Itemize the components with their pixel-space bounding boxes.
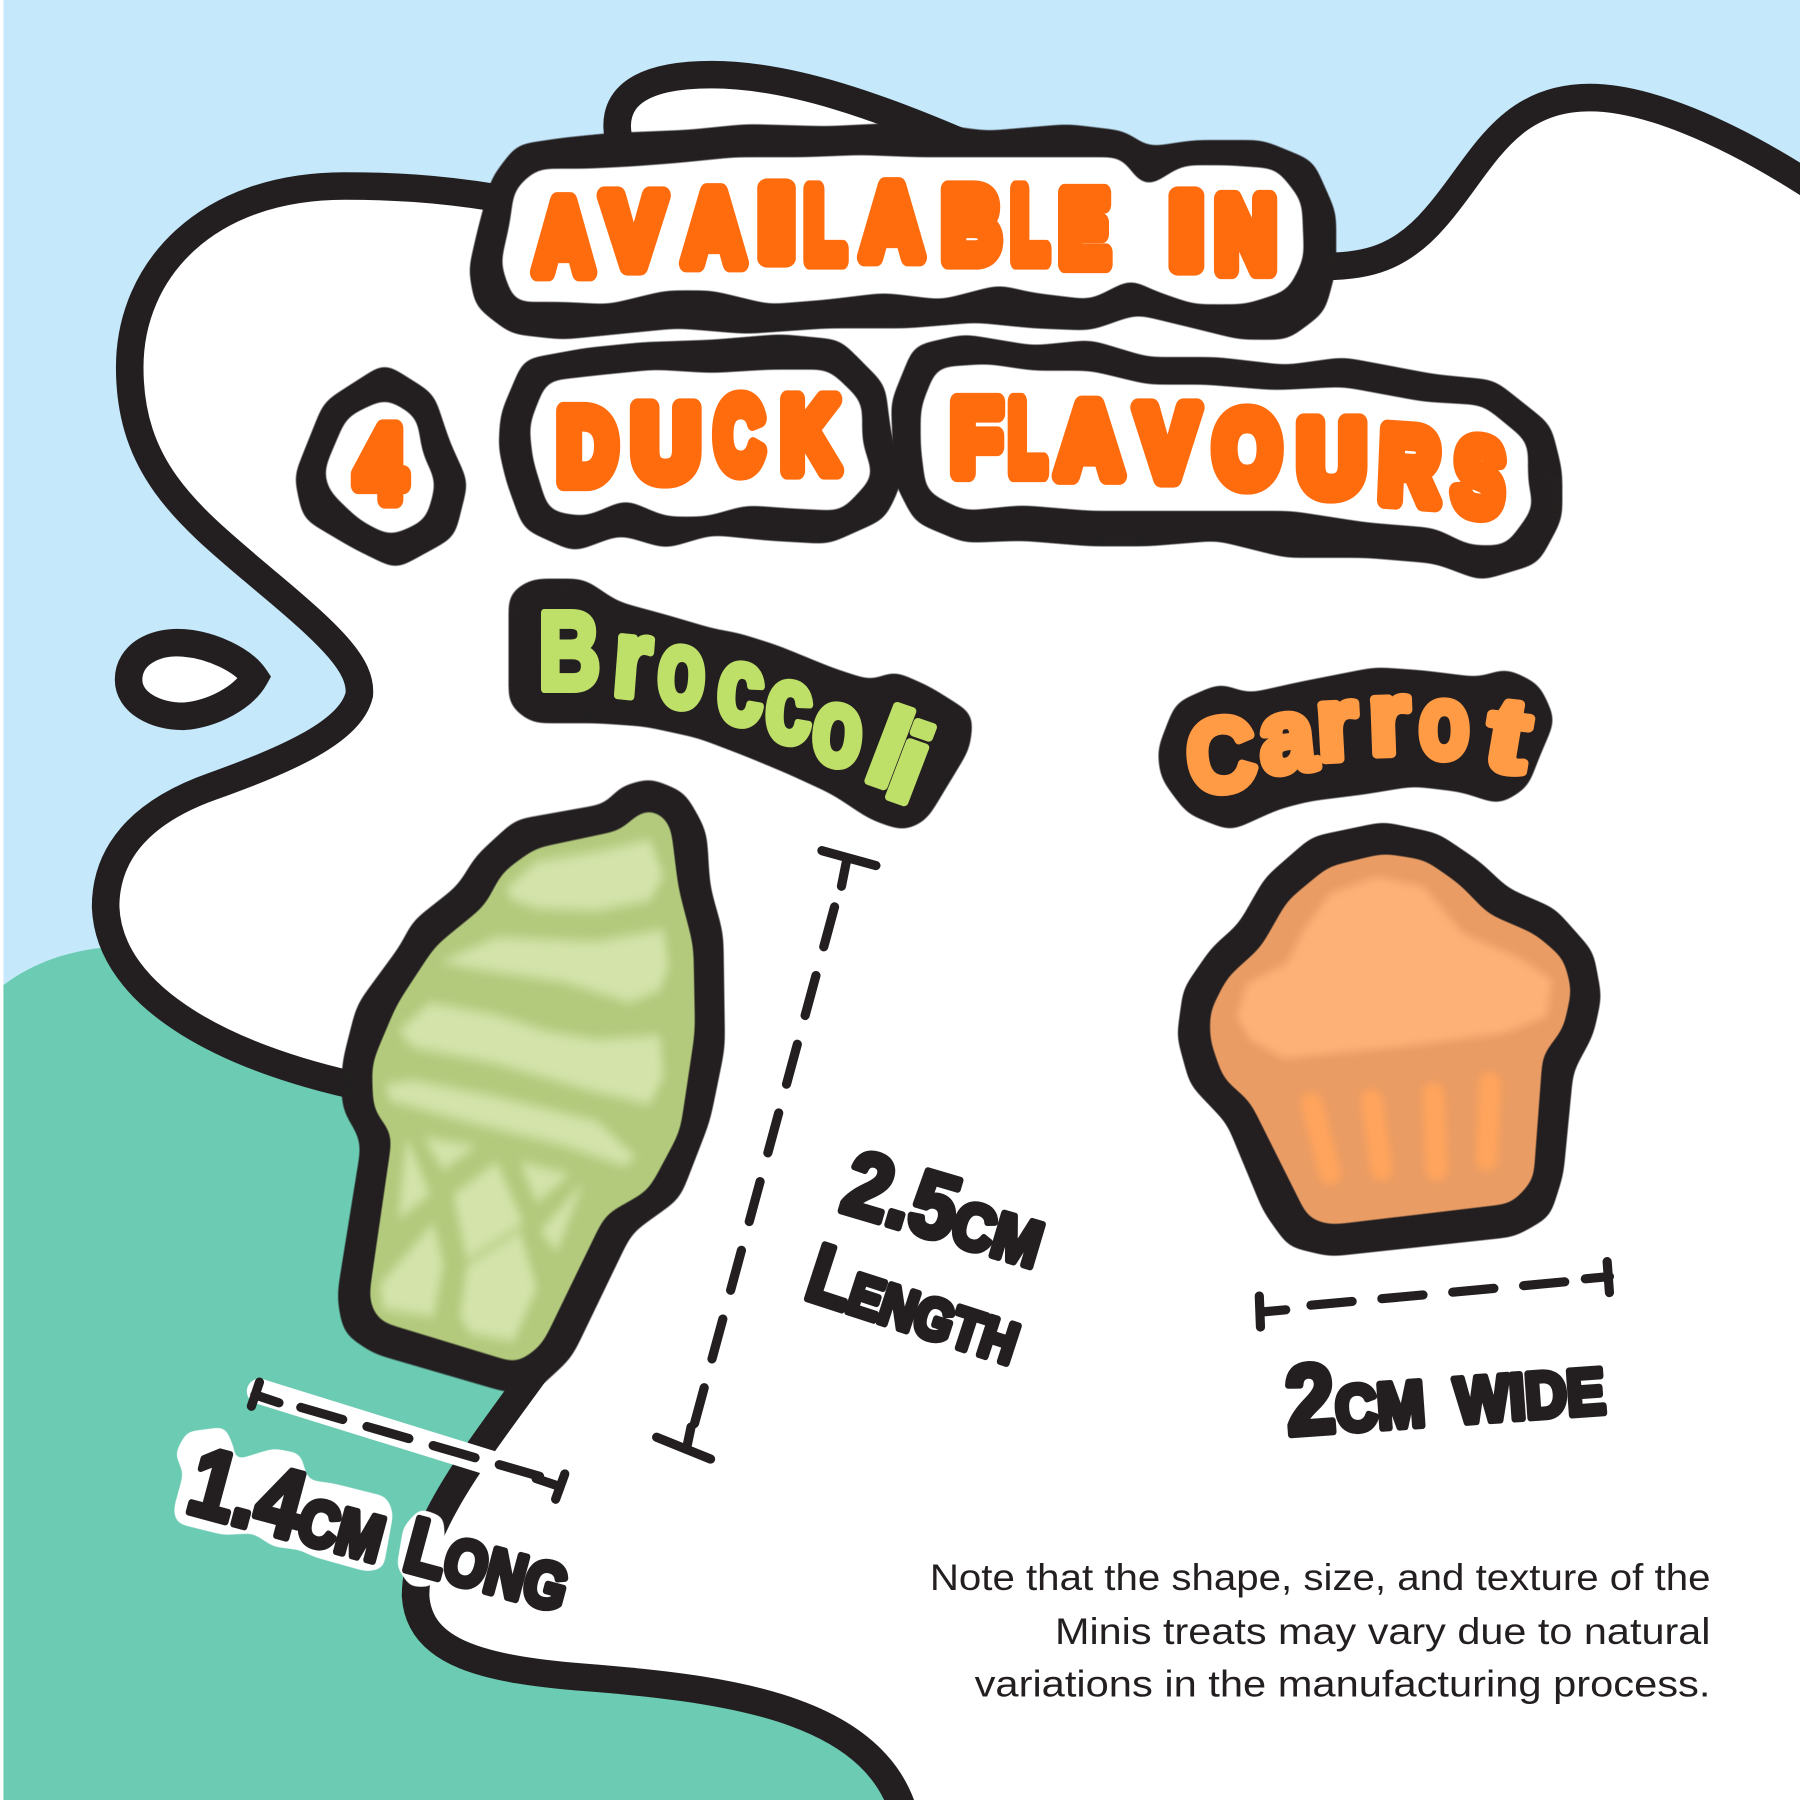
label: Carrot: a xyxy=(1253,674,1321,796)
label: Broccoli: B xyxy=(538,590,600,713)
title line 2: Flavours: L xyxy=(1009,379,1046,495)
label: Broccoli: r xyxy=(609,596,657,722)
label: Broccoli: o xyxy=(806,662,873,791)
title line 2: Duck: U xyxy=(633,385,699,501)
label: Broccoli: c xyxy=(761,641,819,767)
title line 1: Available in: I xyxy=(1171,172,1202,288)
title line 2: Flavours: R xyxy=(1378,405,1442,524)
title line 1: Available in: L xyxy=(805,167,845,283)
label: Broccoli xyxy=(509,579,973,831)
title line 2: Duck: C xyxy=(715,377,763,493)
note text xyxy=(930,1557,1710,1705)
top-left outline xyxy=(106,186,494,1091)
title line 1: Available in: A xyxy=(684,169,744,285)
title line 1: Available in: B xyxy=(942,167,1000,283)
text: 2.5cm length: 2.5CM xyxy=(832,1131,1057,1287)
title line 1: Available in: A xyxy=(862,163,922,279)
note text: Note that the shape, size, and texture of the xyxy=(930,1557,1710,1598)
title line 2: Flavours xyxy=(891,334,1562,581)
label: Broccoli: l xyxy=(853,685,925,812)
background: green hill xyxy=(3,947,930,1800)
measure: 1.4cm long line xyxy=(251,1382,565,1499)
title line 1: Available in: V xyxy=(604,172,664,288)
title line 1: Available in: E xyxy=(1060,170,1109,286)
label: Broccoli: c xyxy=(713,622,771,749)
broccoli treat: ice cream cone xyxy=(337,778,725,1392)
text: 2.5cm length: LENGTH xyxy=(797,1226,1033,1382)
title line 2: Duck: D xyxy=(558,388,616,504)
text backing: 1.4cm outline xyxy=(173,1427,445,1587)
measure: 2cm wide line xyxy=(1259,1262,1609,1327)
title line 1: Available in xyxy=(468,122,1336,340)
text: 2cm wide: 2CM WIDE xyxy=(1282,1324,1608,1456)
label: Carrot: t xyxy=(1479,675,1536,796)
title line 2: Flavours: O xyxy=(1215,390,1280,506)
label: Carrot: C xyxy=(1181,694,1261,816)
label: Carrot: o xyxy=(1419,664,1469,780)
label: Carrot xyxy=(1157,659,1555,831)
carrot treat: muffin xyxy=(1177,822,1602,1257)
note text: variations in the manufacturing process. xyxy=(975,1664,1710,1705)
top-right outline xyxy=(1326,98,1800,266)
title line 2: Flavours: S xyxy=(1450,416,1510,536)
title line 1: Available in: L xyxy=(1011,167,1048,283)
title line 2: Flavours: A xyxy=(1057,381,1122,497)
label: Broccoli: o xyxy=(653,605,712,732)
lower outline xyxy=(416,1366,907,1800)
title line 2: Duck: K xyxy=(782,377,838,493)
title line 2: Flavours: U xyxy=(1298,400,1365,516)
text: 1.4cm long: 1.4CM LONG xyxy=(178,1428,583,1632)
label: Carrot: r xyxy=(1366,659,1412,776)
title line 2: 4: 4 xyxy=(357,405,404,521)
title line 2: Duck xyxy=(498,334,902,552)
title line 1: Available in: I xyxy=(760,164,793,280)
droplet xyxy=(129,643,255,716)
title line 2: 4 xyxy=(294,363,468,569)
title line 1: Available in: N xyxy=(1216,176,1275,292)
text: 2.5cm length xyxy=(797,1131,1057,1382)
label: Carrot: r xyxy=(1313,664,1360,782)
note text: Minis treats may vary due to natural xyxy=(1055,1611,1710,1652)
top loop outline xyxy=(617,75,964,143)
measure: 2.5cm length line xyxy=(657,851,876,1459)
title line 1: Available in: A xyxy=(535,178,592,294)
title line 2: Flavours: F xyxy=(952,379,1001,495)
title line 2: Flavours: V xyxy=(1138,385,1197,501)
label: Broccoli: i xyxy=(873,701,946,828)
